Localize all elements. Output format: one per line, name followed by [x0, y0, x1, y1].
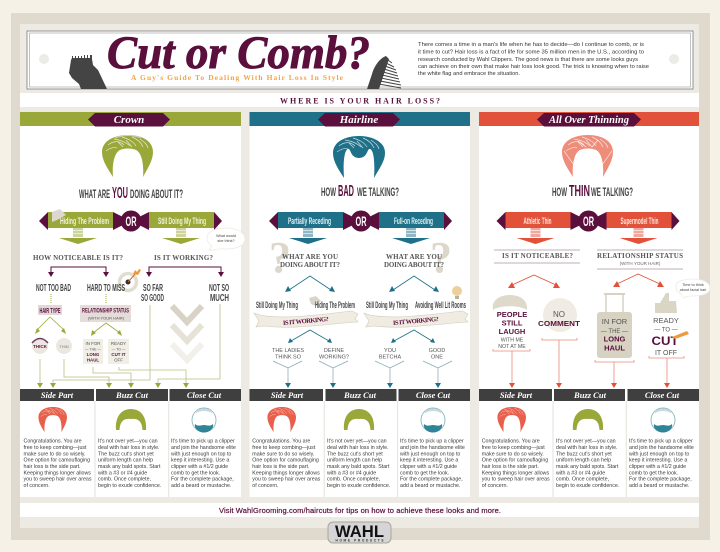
thinning ribbons: Athletic Thin — [524, 216, 552, 226]
thinning: close cut text: add a beard or mustache. — [629, 483, 689, 489]
long haul tag: — THE — — [85, 348, 101, 352]
hairline: buzz cut text: begin to exude confidence. — [327, 483, 390, 489]
thinning: buzz cut text: mask any bald spots. Start — [556, 464, 619, 470]
thinning: side part text: One option for camouflaging — [482, 458, 548, 464]
thinning result icons — [497, 407, 675, 432]
crown: close cut text: with just enough on top to — [171, 451, 231, 457]
option: suitcase long haul: HAUL — [604, 344, 625, 352]
icon: question marks — [269, 233, 452, 282]
red result connectors — [493, 338, 684, 388]
crown: close cut text: and join the handsome elite — [171, 445, 236, 451]
banner: is it working left — [254, 311, 358, 327]
option: people still laugh: STILL — [502, 318, 523, 328]
hairline options — [256, 300, 466, 310]
crown answers — [36, 283, 229, 304]
option: people still laugh: NOT AT ME — [498, 344, 526, 350]
crown: close cut text: It's time to pick up a clipper — [171, 439, 235, 445]
hairline: side part text: you to sweep hair over areas — [252, 477, 321, 483]
option: suitcase long haul: LONG — [604, 334, 625, 344]
red branches — [508, 274, 664, 288]
crown: buzz cut text: begin to exude confidence. — [98, 483, 161, 489]
crown: buzz cut text: The buzz cut's short yet — [98, 451, 154, 457]
ready to cut tag: OFF — [114, 358, 123, 362]
thinning: side part text: hair loss is the side part. — [482, 464, 539, 470]
ready to cut tag: READY — [111, 341, 126, 346]
hairline: buzz cut text: It's not over yet—you can — [327, 439, 387, 445]
crown: close cut text: comb to get the look. — [171, 470, 220, 476]
hairline: side part text: Congratulations. You are — [252, 439, 310, 445]
hairline: buzz cut text: mask any bald spots. Start — [327, 464, 390, 470]
hairline outcomes: GOOD — [429, 348, 445, 354]
hairline: close cut text: and join the handsome elite — [400, 445, 465, 451]
thick / thin circles: THIN — [59, 344, 69, 349]
thinning ribbons — [496, 210, 680, 244]
crown: side part text: free to keep combing—just — [24, 445, 87, 451]
crown: buzz cut text: uniform length can help — [98, 458, 153, 464]
crown: side part text: Congratulations. You are — [24, 439, 82, 445]
hairline questions — [280, 253, 444, 269]
thinning: buzz cut text: It's not over yet—you can — [556, 439, 616, 445]
crown: buzz cut text: comb. Once complete, — [98, 477, 151, 483]
crown results header: Side Part — [41, 390, 74, 400]
thinning results header — [479, 389, 699, 401]
crown ribbons — [39, 209, 222, 244]
option: suitcase long haul — [597, 294, 632, 358]
crown answers: NOT TOO BAD — [36, 283, 71, 294]
hairline: side part text: One option for camouflaging — [252, 458, 319, 464]
callout: what would she think — [207, 228, 245, 250]
icon: hairline hair — [333, 136, 385, 178]
intro text: it time to cut? Hair loss is a fact of life for some 35 million men in the U.S., according to — [418, 50, 644, 56]
green result arrows — [37, 304, 220, 388]
green branch arrows — [35, 317, 122, 336]
ready to cut tag: CUT IT — [111, 352, 126, 357]
thinning: buzz cut text: The buzz cut's short yet — [556, 451, 612, 457]
hairline question: WE TALKING? — [357, 185, 399, 199]
hairline: side part text: free to keep combing—just — [252, 445, 316, 451]
ready to cut tag: — TO — — [112, 348, 126, 352]
crown: close cut text: add a beard or mustache. — [171, 483, 231, 489]
tag: relationship status: RELATIONSHIP STATUS — [82, 308, 129, 314]
icon: thinning hair — [562, 135, 613, 177]
thinning: side part text: you to sweep hair over areas — [482, 477, 550, 483]
hairline: close cut text: comb to get the look. — [400, 470, 449, 476]
crown: buzz cut text: deal with hair loss in style. — [98, 445, 160, 451]
thick / thin circles: THICK — [33, 344, 48, 349]
long haul tag: IN FOR — [86, 341, 100, 346]
crown: close cut text: keep it interesting. Use a — [171, 458, 229, 464]
hairline question: BAD — [338, 183, 354, 200]
callout: what would she think: What would — [216, 234, 236, 238]
intro text: There comes a time in a man's life when he has to decide—do I continue to comb, or is — [418, 42, 644, 48]
thinning: buzz cut text: uniform length can help — [556, 458, 611, 464]
thinning: buzz cut text: comb. Once complete, — [556, 477, 609, 483]
thinning results header: Buzz Cut — [573, 390, 607, 400]
thinning question: THIN — [569, 183, 590, 200]
crown ribbons: Hiding The Problem — [60, 216, 109, 226]
crown answers: SO GOOD — [141, 293, 164, 304]
ready to cut tag — [108, 339, 129, 364]
dotted connectors — [51, 294, 106, 304]
crown header band: Crown — [114, 114, 144, 126]
hairline: buzz cut text: with a #3 or #4 guide — [327, 470, 376, 476]
hairline results header: Side Part — [271, 390, 304, 400]
hairline questions: WHAT ARE YOU — [386, 253, 442, 261]
hairline questions: WHAT ARE YOU — [282, 253, 338, 261]
thinning questions: RELATIONSHIP STATUS — [597, 252, 683, 260]
option: people still laugh: PEOPLE — [497, 310, 527, 319]
hairline: side part text: make sure to do so wisely. — [252, 451, 314, 457]
icon: question marks: ? — [269, 233, 291, 282]
thinning questions: IS IT NOTICEABLE? — [502, 252, 574, 260]
thinning: side part text: make sure to do so wisely. — [482, 451, 544, 457]
crown: side part text: hair loss is the side part. — [24, 464, 81, 470]
logo: WAHL: WAHL — [335, 522, 384, 541]
crown: side part text: make sure to do so wisely. — [24, 451, 86, 457]
icon: hair clipper — [69, 55, 107, 89]
crown ribbons: OR — [126, 213, 136, 229]
crown: buzz cut text: It's not over yet—you can — [98, 439, 158, 445]
banner: is it working right — [364, 311, 468, 327]
hairline options: Still Doing My Thing — [256, 300, 298, 310]
option: ready to cut it off — [652, 293, 689, 357]
crown question — [79, 185, 183, 202]
hairline ribbons: OR — [356, 213, 366, 229]
thinning: close cut text: with just enough on top to — [629, 451, 689, 457]
hairline: close cut text: add a beard or mustache. — [400, 483, 460, 489]
crown flow questions — [33, 254, 214, 262]
long haul tag — [83, 339, 103, 364]
header panel — [27, 27, 693, 89]
crown: side part text: you to sweep hair over areas — [24, 477, 92, 483]
callout: what would she think: she think? — [217, 239, 235, 243]
hairline: close cut text: clipper with a #1/2 guide — [400, 464, 457, 470]
option: no comment: COMMENT — [538, 319, 580, 328]
thinning results header: Close Cut — [645, 390, 680, 400]
icon: comb — [367, 56, 401, 89]
option: suitcase long haul: — THE — — [601, 329, 628, 335]
thinning question: WE TALKING? — [591, 185, 633, 199]
teal lower branches — [288, 330, 435, 343]
thinning question: HOW — [552, 185, 567, 199]
tagline: A Guy's Guide To Dealing With Hair Loss In Style — [131, 73, 344, 82]
hairline: close cut text: keep it interesting. Use a — [400, 458, 458, 464]
hairline: side part text: of concern. — [252, 483, 279, 489]
hairline: buzz cut text: The buzz cut's short yet — [327, 451, 383, 457]
thinning: close cut text: For the complete package, — [629, 477, 692, 483]
thinning: side part text: free to keep combing—just — [482, 445, 545, 451]
thinning: close cut text: and join the handsome elite — [629, 445, 694, 451]
crown answers: MUCH — [210, 293, 229, 304]
hairline outcomes: BETCHA — [379, 354, 401, 360]
title: Cut or Comb? — [107, 27, 370, 79]
thinning: buzz cut text: begin to exude confidence. — [556, 483, 619, 489]
long haul tag: LONG — [87, 352, 100, 357]
hairline ribbons — [269, 210, 452, 244]
tag: hair type: HAIR TYPE — [40, 308, 61, 315]
crown results header: Buzz Cut — [115, 390, 149, 400]
callout: facial hair — [676, 279, 710, 298]
hairline: buzz cut text: deal with hair loss in style. — [327, 445, 389, 451]
crown results header — [20, 389, 241, 401]
hairline: close cut text: It's time to pick up a clipper — [400, 439, 464, 445]
thinning questions — [494, 250, 683, 269]
thinning: side part text: Congratulations. You are — [482, 439, 540, 445]
banner: is it working right: IS IT WORKING? — [393, 316, 439, 327]
hairline header band — [250, 112, 470, 126]
section heading bar — [20, 93, 699, 107]
hairline questions: DOING ABOUT IT? — [280, 261, 340, 269]
hairline question: HOW — [321, 185, 336, 199]
footer call to action: Visit WahlGrooming.com/haircuts for tips on how to achieve these looks and more. — [219, 506, 501, 515]
tag: relationship status: (WITH YOUR HAIR) — [88, 316, 125, 320]
option: no comment — [538, 298, 580, 332]
crown: side part text: of concern. — [24, 483, 50, 489]
panel: crown — [20, 112, 245, 497]
hairline result icons — [267, 407, 445, 432]
option: ready to cut it off: — TO — — [654, 328, 678, 334]
thinning results header: Side Part — [500, 390, 533, 400]
hairline outcomes: THINK SO — [275, 354, 302, 360]
tag: hair type — [38, 305, 62, 315]
option: people still laugh: LAUGH — [499, 327, 525, 336]
hairline: buzz cut text: uniform length can help — [327, 458, 382, 464]
intro text — [418, 42, 649, 77]
purple split arrows — [48, 267, 224, 277]
thinning header band: All Over Thinning — [548, 114, 629, 126]
crown answers: HARD TO MISS — [87, 283, 125, 294]
crown answers: NOT SO — [209, 283, 229, 294]
thinning: buzz cut text: deal with hair loss in style. — [556, 445, 618, 451]
intro text: can achieve on their own that make hair loss look good. The trick is knowing when to raise — [418, 64, 649, 70]
intro text: the white flag and embrace the situation. — [418, 71, 520, 77]
callout: facial hair: Time to think — [682, 283, 704, 287]
panel: hairline — [250, 112, 470, 497]
icon: target — [120, 269, 141, 290]
hairline results header — [250, 389, 470, 401]
crown: close cut text: clipper with a #1/2 guide — [171, 464, 228, 470]
banner: is it working left: IS IT WORKING? — [283, 316, 329, 327]
hairline ribbons: Partially Receding — [288, 216, 331, 226]
hairline outcomes: DEFINE — [324, 348, 344, 354]
section heading bar: WHERE IS YOUR HAIR LOSS? — [280, 96, 440, 106]
hairline ribbons: Full-on Receding — [394, 216, 433, 226]
crown results header: Close Cut — [187, 390, 222, 400]
thinning header band — [479, 112, 699, 126]
icon: crown hair — [102, 135, 153, 177]
thinning ribbons: Supermodel Thin — [620, 216, 658, 226]
crown ribbons: Still Doing My Thing — [158, 216, 206, 226]
hairline outcomes: YOU — [384, 348, 396, 354]
hairline results header: Buzz Cut — [343, 390, 377, 400]
panel: hairline: Avoiding Well Lit Rooms — [415, 300, 466, 310]
hairline options: Hiding The Problem — [315, 300, 355, 310]
hairline outcomes: ONE — [431, 354, 443, 360]
thinning: close cut text: clipper with a #1/2 guide — [629, 464, 686, 470]
panel: all over thinning — [479, 112, 710, 497]
panel: crown: DOING ABOUT IT? — [130, 187, 183, 201]
option: suitcase long haul: IN FOR — [602, 317, 628, 326]
tag: relationship status — [80, 305, 131, 322]
crown question: YOU — [112, 185, 128, 202]
hairline questions: DOING ABOUT IT? — [384, 261, 444, 269]
icon: question marks: ? — [430, 233, 452, 282]
thinning: close cut text: comb to get the look. — [629, 470, 678, 476]
option: people still laugh: WITH ME — [501, 338, 524, 344]
hairline: side part text: hair loss is the side part. — [252, 464, 309, 470]
crown answers: SO FAR — [143, 283, 163, 294]
thinning: side part text: of concern. — [482, 483, 508, 489]
hairline: side part text: Keeping things longer allows — [252, 470, 320, 476]
hairline: buzz cut text: comb. Once complete, — [327, 477, 380, 483]
hairline results header: Close Cut — [416, 390, 451, 400]
option: ready to cut it off: READY — [653, 316, 679, 325]
crown flow questions: HOW NOTICEABLE IS IT? — [33, 254, 124, 262]
crown flow questions: IS IT WORKING? — [154, 254, 214, 262]
footer call to action — [20, 503, 699, 517]
hairline outcomes — [272, 348, 445, 360]
crown result icons — [38, 407, 216, 432]
hairline options: Still Doing My Thing — [366, 300, 408, 310]
thinning: close cut text: It's time to pick up a clipper — [629, 439, 693, 445]
crown header band — [20, 112, 241, 126]
option: no comment: NO — [553, 310, 565, 319]
teal upper branches — [285, 276, 439, 292]
option: ready to cut it off: IT OFF — [655, 350, 677, 357]
crown: side part text: Keeping things longer allows — [24, 470, 91, 476]
hairline outcomes: WORKING? — [319, 354, 349, 360]
icon: hand and bulb — [309, 286, 462, 306]
thinning: buzz cut text: with a #3 or #4 guide — [556, 470, 605, 476]
thinning: close cut text: keep it interesting. Use a — [629, 458, 687, 464]
logo: WAHL: HOME PRODUCTS — [336, 538, 384, 542]
hairline: close cut text: For the complete package, — [400, 477, 463, 483]
hairline outcomes: THE LADIES — [272, 348, 304, 354]
callout: facial hair: about facial hair — [680, 288, 707, 292]
crown: close cut text: For the complete package, — [171, 477, 234, 483]
crown question: WHAT ARE — [79, 187, 110, 201]
long haul tag: HAUL — [87, 358, 99, 362]
hairline question — [321, 183, 399, 200]
teal result connectors — [273, 361, 452, 388]
thinning question — [552, 183, 633, 200]
chevrons — [172, 306, 202, 360]
thinning: side part text: Keeping things longer allows — [482, 470, 549, 476]
option: people still laugh — [493, 295, 527, 350]
thinning questions: (WITH YOUR HAIR) — [620, 261, 661, 266]
thinning ribbons: OR — [583, 213, 594, 229]
hairline header band: Hairline — [339, 114, 378, 126]
crown: buzz cut text: with a #3 or #4 guide — [98, 470, 147, 476]
crown: buzz cut text: mask any bald spots. Start — [98, 464, 161, 470]
thick / thin circles — [32, 338, 72, 354]
hairline: close cut text: with just enough on top to — [400, 451, 460, 457]
intro text: research conducted by Wahl Clippers. The good news is that there are some looks guys — [418, 57, 638, 63]
option: ready to cut it off: CUT — [652, 334, 679, 348]
crown: side part text: One option for camouflaging — [24, 458, 90, 464]
